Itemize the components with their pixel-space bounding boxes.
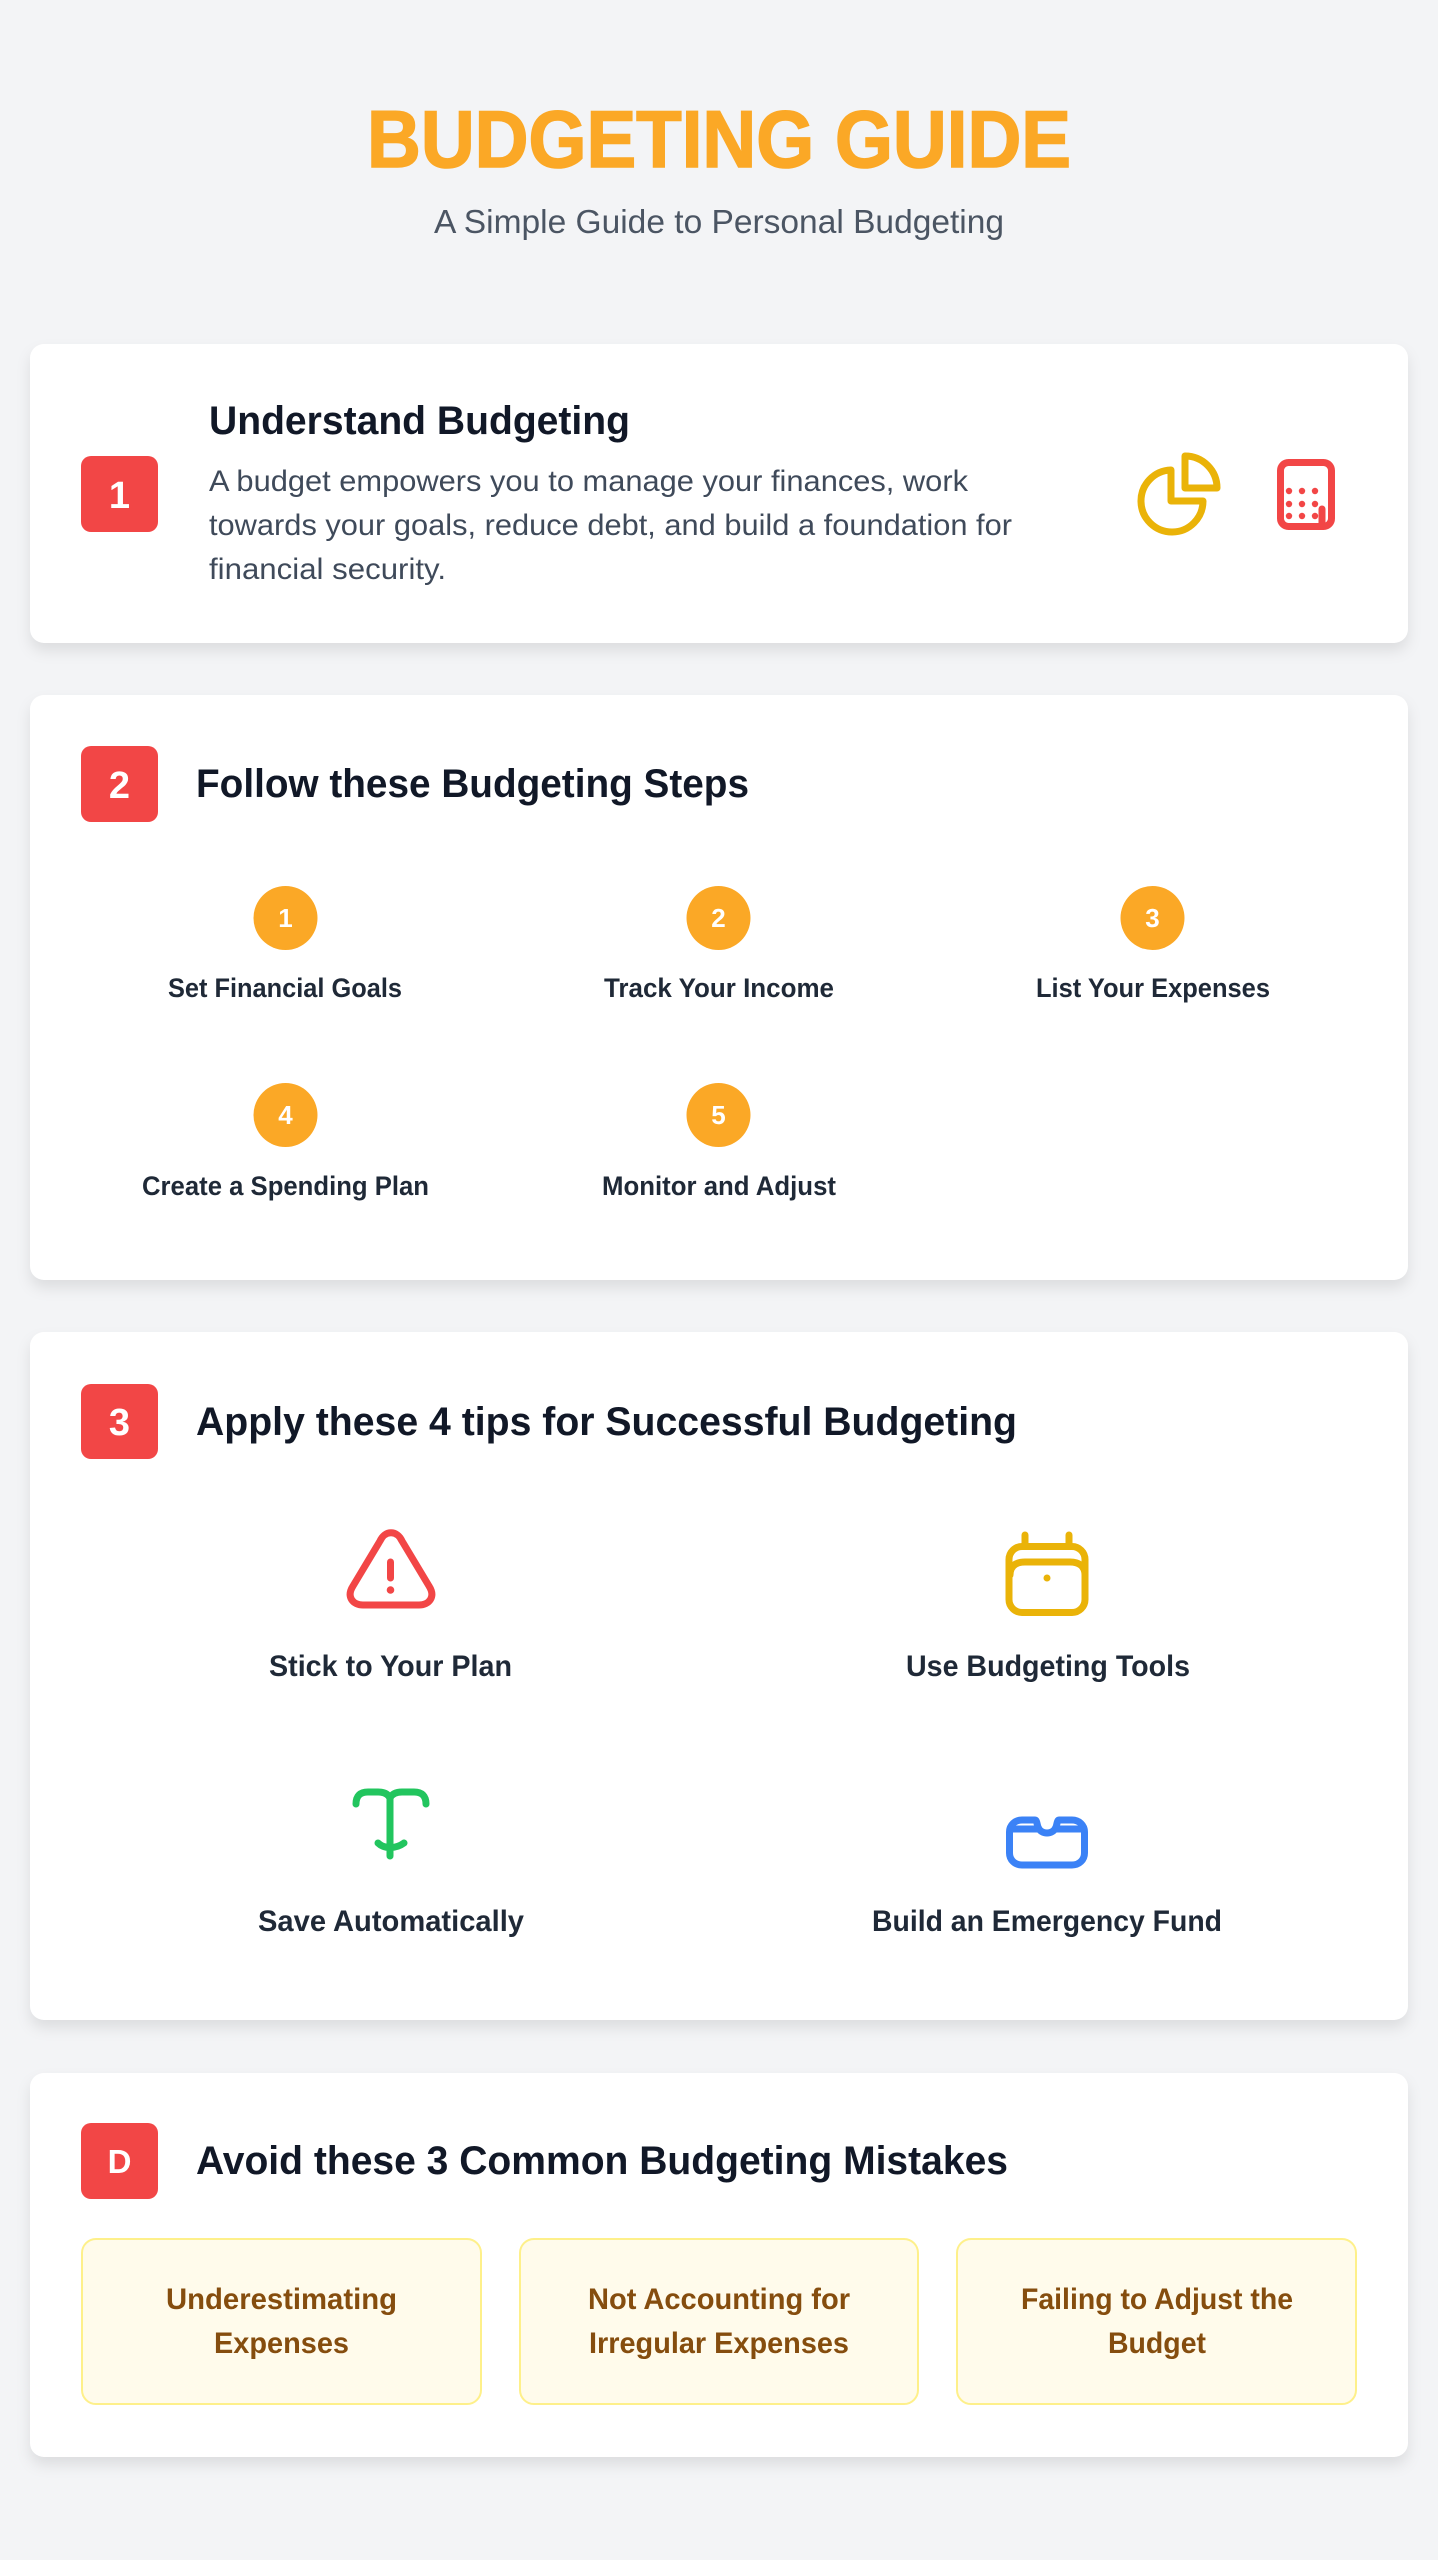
step 4: 4 bbox=[278, 1100, 293, 1130]
panel: budgeting tips bbox=[30, 1332, 1408, 2020]
tip: save automatically: Save Automatically bbox=[258, 1905, 524, 1938]
step 2: Track Your Income bbox=[604, 973, 834, 1003]
panel: budgeting steps bbox=[30, 695, 1408, 1280]
step 1 bbox=[168, 886, 402, 1003]
tip: save automatically bbox=[258, 1792, 524, 1938]
mistake card 1: Underestimating bbox=[166, 2283, 397, 2316]
section badge 3: 3 bbox=[109, 1402, 130, 1444]
step 1: Set Financial Goals bbox=[168, 973, 402, 1003]
heading: understand budgeting: Understand Budgeting bbox=[209, 399, 630, 443]
heading: avoid these mistakes: Avoid these 3 Common Budgeting Mistakes bbox=[196, 2139, 1008, 2183]
step 3: 3 bbox=[1145, 903, 1160, 933]
mistake card 1: Expenses bbox=[214, 2327, 349, 2360]
section badge 3 bbox=[81, 1384, 158, 1459]
mistake card 3: Budget bbox=[1108, 2327, 1206, 2360]
description text: financial security. bbox=[209, 553, 446, 586]
tip: use budgeting tools: Use Budgeting Tools bbox=[906, 1650, 1190, 1683]
tip: stick to your plan: Stick to Your Plan bbox=[269, 1650, 512, 1683]
section badge 1 bbox=[81, 456, 158, 532]
step 5 bbox=[602, 1083, 836, 1201]
step 2 bbox=[604, 886, 834, 1003]
panel: understand budgeting bbox=[30, 344, 1408, 643]
tip: stick to your plan bbox=[269, 1533, 512, 1683]
step 1: 1 bbox=[278, 903, 293, 933]
icon: calendar bbox=[1009, 1535, 1085, 1612]
step 4 bbox=[142, 1083, 429, 1201]
step 5: 5 bbox=[711, 1100, 726, 1130]
icon: warning triangle bbox=[350, 1533, 432, 1605]
section badge 2: 2 bbox=[109, 765, 130, 807]
mistake card 1 bbox=[82, 2239, 481, 2404]
mistake card 2: Irregular Expenses bbox=[589, 2327, 849, 2360]
section badge 1: 1 bbox=[109, 475, 130, 517]
mistake card 2: Not Accounting for bbox=[588, 2283, 850, 2316]
tip: use budgeting tools bbox=[906, 1535, 1190, 1683]
step 5: Monitor and Adjust bbox=[602, 1171, 836, 1201]
step 3 bbox=[1036, 886, 1270, 1003]
icon: pie chart bbox=[1141, 456, 1217, 532]
panel: common mistakes bbox=[30, 2073, 1408, 2457]
mistake card 3 bbox=[957, 2239, 1356, 2404]
title: BUDGETING GUIDE bbox=[367, 95, 1071, 185]
icon: wallet bbox=[1010, 1820, 1084, 1865]
step 3: List Your Expenses bbox=[1036, 973, 1270, 1003]
section badge D bbox=[81, 2123, 158, 2199]
step 4: Create a Spending Plan bbox=[142, 1171, 429, 1201]
mistake card 2 bbox=[520, 2239, 918, 2404]
mistake card 3: Failing to Adjust the bbox=[1021, 2283, 1293, 2316]
tip: build an emergency fund: Build an Emergency Fund bbox=[872, 1905, 1222, 1938]
step 2: 2 bbox=[711, 903, 726, 933]
heading: apply these 4 tips: Apply these 4 tips for Successful Budgeting bbox=[196, 1400, 1017, 1444]
icon: calculator bbox=[1280, 462, 1332, 526]
subtitle: A Simple Guide to Personal Budgeting bbox=[434, 203, 1004, 240]
tip: build an emergency fund bbox=[872, 1820, 1222, 1938]
section badge D: D bbox=[108, 2143, 131, 2180]
section badge 2 bbox=[81, 746, 158, 822]
description text: A budget empowers you to manage your finances, work bbox=[209, 465, 969, 498]
header bbox=[367, 95, 1071, 240]
description text bbox=[209, 465, 1012, 586]
description text: towards your goals, reduce debt, and build a foundation for bbox=[209, 509, 1012, 542]
heading: follow these budgeting steps: Follow these Budgeting Steps bbox=[196, 762, 749, 806]
icon: T-shaped stem bbox=[356, 1792, 426, 1856]
